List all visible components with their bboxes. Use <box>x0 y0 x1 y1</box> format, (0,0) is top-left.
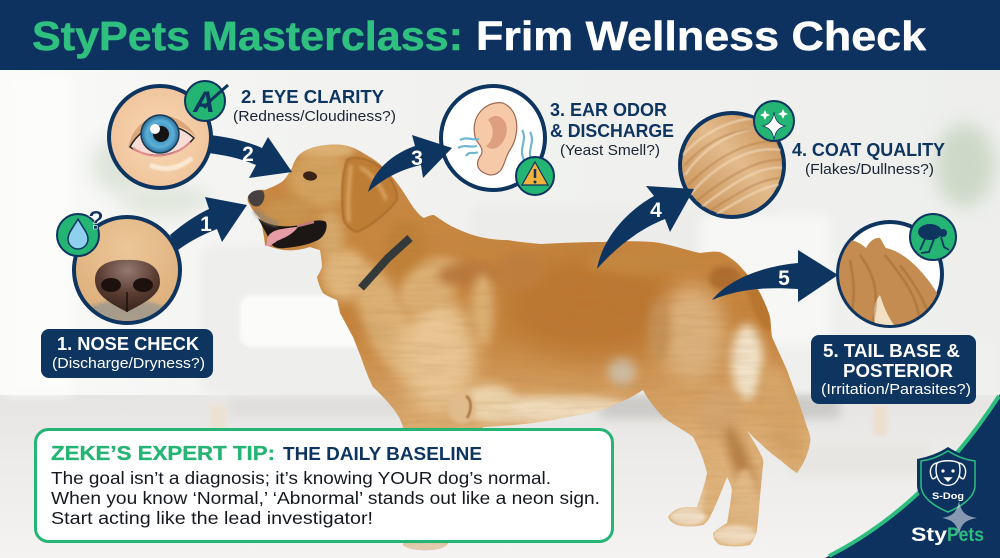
fur streak texture <box>315 171 760 544</box>
icon: sparkle badge <box>754 101 794 141</box>
ear odor label: 3. EAR ODOR <box>550 100 667 120</box>
dog front leg elbow <box>448 392 476 424</box>
arrow 3: 3 <box>411 147 423 170</box>
tail circle <box>835 214 956 335</box>
callout: expert tip: The goal isn’t a diagnosis; it’s knowing YOUR dog’s normal. <box>51 468 551 488</box>
nose check label box <box>41 329 213 378</box>
green stripe <box>829 396 999 556</box>
arrow 1: 1 <box>200 213 212 236</box>
dog collar <box>361 238 410 288</box>
header band <box>0 0 1000 70</box>
arrow 4: 4 <box>650 199 662 222</box>
fur shading <box>240 140 820 555</box>
sofa <box>200 245 400 395</box>
dog muzzle shading <box>255 210 278 224</box>
panel: ear odor <box>441 86 674 195</box>
callout: expert tip: ZEKE’S EXPERT TIP: <box>51 443 275 465</box>
dog eye <box>302 171 318 181</box>
arrow 3 <box>368 135 452 192</box>
callout: expert tip: When you know ‘Normal,’ ‘Abnormal’ stands out like a neon sign. <box>51 488 600 508</box>
shield logo <box>917 447 978 516</box>
nose circle <box>57 205 180 323</box>
arrow 5: 5 <box>778 267 790 290</box>
eye clarity label: 2. EYE CLARITY <box>241 87 384 107</box>
title <box>32 13 926 59</box>
icon: warning badge <box>516 157 554 195</box>
panel: coat quality <box>680 101 945 217</box>
eye circle <box>109 81 228 188</box>
ear odor label <box>550 100 674 159</box>
dog body silhouette <box>248 145 810 550</box>
coat quality label: 4. COAT QUALITY <box>792 140 945 160</box>
arrow 4 <box>597 186 694 269</box>
tail base label box: 5. TAIL BASE & <box>823 341 960 361</box>
brand corner and logo <box>825 394 1000 558</box>
callout: expert tip: THE DAILY BASELINE <box>283 444 482 464</box>
dog ear <box>342 158 397 232</box>
tail base label box: POSTERIOR <box>843 361 953 381</box>
tail base label box <box>811 335 976 404</box>
eye clarity label: (Redness/Cloudiness?) <box>233 108 396 125</box>
decorative star <box>942 501 977 535</box>
brand name: Sty <box>911 525 948 546</box>
icon: water drop badge: ? <box>88 205 104 235</box>
ear odor label: & DISCHARGE <box>550 121 674 141</box>
icon: eye check badge: A <box>192 86 215 119</box>
coat circle <box>680 101 794 217</box>
panel: nose check <box>41 205 213 378</box>
golden retriever illustration <box>240 140 820 555</box>
arrow 2: 2 <box>242 143 254 166</box>
nose check label box: 1. NOSE CHECK <box>57 334 199 354</box>
eye clarity label <box>233 87 396 125</box>
arrow 5 <box>712 250 838 302</box>
navy corner <box>825 394 1000 558</box>
arrow 2 <box>208 135 292 178</box>
nose check label box: (Discharge/Dryness?) <box>52 355 205 372</box>
brand name <box>911 525 984 546</box>
coat quality label: (Flakes/Dullness?) <box>805 161 934 178</box>
tail base label box: (Irritation/Parasites?) <box>821 381 971 398</box>
icon: dog face <box>930 461 966 485</box>
ear highlight <box>348 165 386 222</box>
ear odor label: (Yeast Smell?) <box>560 142 660 159</box>
coat quality label <box>792 140 945 178</box>
title: StyPets Masterclass: <box>32 13 463 59</box>
panel: tail base <box>811 214 976 404</box>
callout: expert tip <box>36 430 612 542</box>
callout: expert tip: Start acting like the lead investigator! <box>51 508 373 528</box>
ear circle <box>441 86 554 195</box>
dog nose <box>248 190 264 207</box>
panel: eye clarity <box>109 81 396 188</box>
shield logo: S-Dog <box>932 491 964 502</box>
icon: flea badge <box>910 214 956 260</box>
brand name: Pets <box>947 525 984 546</box>
arrow 1 <box>170 197 247 250</box>
title: Frim Wellness Check <box>476 13 926 59</box>
dog mouth and tongue <box>258 218 327 248</box>
